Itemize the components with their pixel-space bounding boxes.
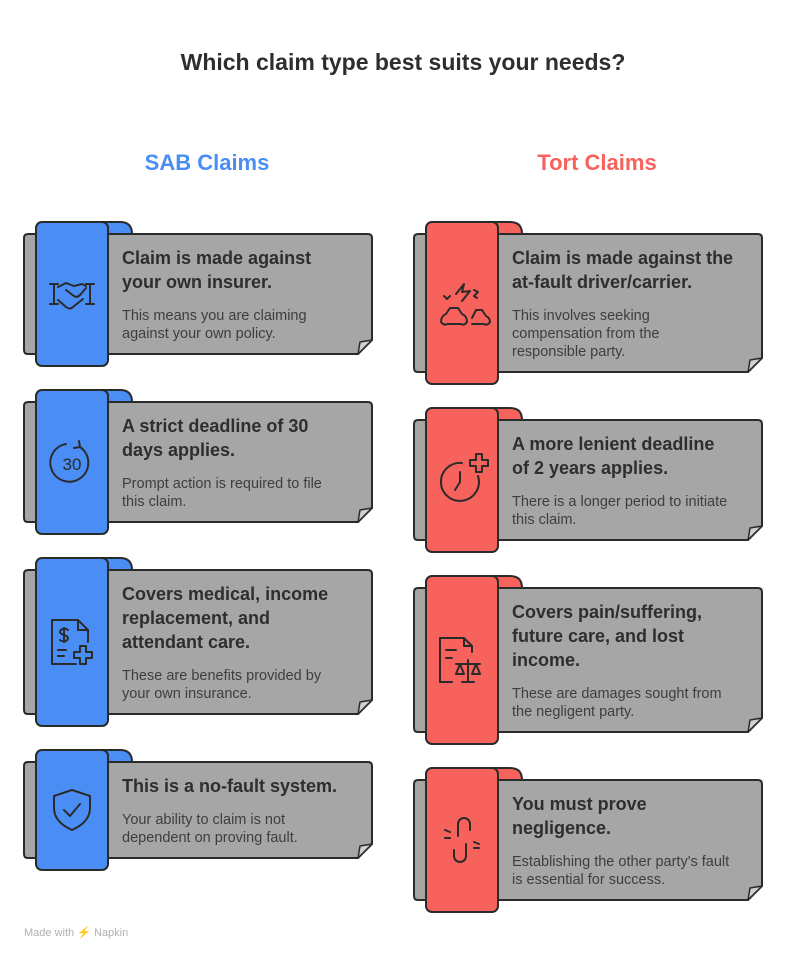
icon: 30 days clock: 30 [63,455,81,474]
card: SAB 30 days [24,390,372,534]
card: SAB 30 days: days applies. [122,440,235,460]
card: Tort 2 years: A more lenient deadline [512,434,714,454]
card: SAB coverage: attendant care. [122,632,250,652]
card: SAB 30 days: this claim. [122,494,186,510]
card: Tort negligence: negligence. [512,818,611,838]
card: SAB no-fault: Your ability to claim is not [122,812,285,828]
footer: made with napkin: Made with ⚡ Napkin [24,926,128,939]
card: Tort at-fault: compensation from the [512,326,660,342]
card: Tort damages: Covers pain/suffering, [512,602,702,622]
card: Tort damages: the negligent party. [512,704,634,720]
card: SAB 30 days: Prompt action is required to file [122,476,322,492]
card: Tort at-fault: at-fault driver/carrier. [512,272,692,292]
card: SAB own insurer: This means you are claiming [122,308,307,324]
card: Tort at-fault: Claim is made against the [512,248,733,268]
icon: 30 days clock [50,441,88,482]
card: SAB coverage: replacement, and [122,608,270,628]
card: Tort negligence: You must prove [512,794,647,814]
card: SAB own insurer [24,222,372,366]
card: Tort 2 years [414,408,762,552]
card: SAB no-fault: dependent on proving fault. [122,830,298,846]
card: SAB coverage [24,558,372,726]
card: Tort negligence: is essential for success. [512,872,665,888]
icon: medical bill [52,620,92,664]
card: Tort 2 years: There is a longer period to initiate [512,494,727,510]
icon: broken chain [445,818,479,862]
card: SAB 30 days: A strict deadline of 30 [122,416,308,436]
card: Tort negligence [414,768,762,912]
icon: handshake [50,283,94,308]
title: Which claim type best suits your needs? [181,49,625,75]
card: Tort damages [414,576,762,744]
card: SAB own insurer: your own insurer. [122,272,272,292]
card: Tort at-fault [414,222,762,384]
heading: SAB Claims: SAB Claims [145,150,269,175]
card: SAB coverage: your own insurance. [122,686,252,702]
card: SAB no-fault: This is a no-fault system. [122,776,337,796]
card: Tort 2 years: this claim. [512,512,576,528]
card: Tort at-fault: This involves seeking [512,308,650,324]
icon: car crash [441,284,490,325]
card: Tort at-fault: responsible party. [512,344,625,360]
card: SAB coverage: These are benefits provided by [122,668,322,684]
card: Tort damages: These are damages sought from [512,686,722,702]
heading: Tort Claims: Tort Claims [537,150,657,175]
card: SAB no-fault [24,750,372,870]
card: SAB coverage: Covers medical, income [122,584,328,604]
icon: shield [54,790,90,830]
card: Tort negligence: Establishing the other party's fault [512,854,729,870]
card: Tort 2 years: of 2 years applies. [512,458,668,478]
card: Tort damages: income. [512,650,580,670]
icon: clock plus [441,454,488,501]
card: SAB own insurer: Claim is made against [122,248,311,268]
card: SAB own insurer: against your own policy. [122,326,276,342]
icon: document scales [440,638,480,682]
card: Tort damages: future care, and lost [512,626,684,646]
